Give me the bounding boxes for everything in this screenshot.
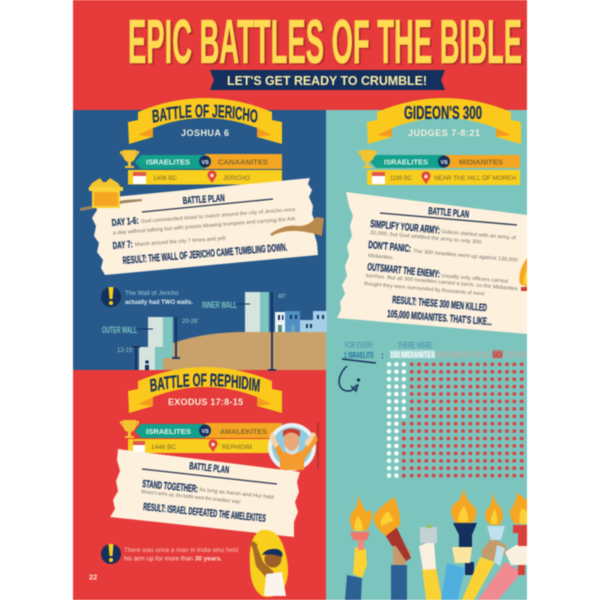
text: ratio heading: 1 ISRAELITE	[344, 350, 374, 360]
matchup bar: VS	[202, 429, 209, 435]
text: battle plan: Usually only officers carried	[441, 273, 508, 285]
page number: 22	[89, 572, 97, 582]
text: ratio heading: WHO WANTED TO KILL	[437, 350, 492, 360]
matchup bar: VS	[202, 160, 209, 166]
diagram: walls of jericho: 40'	[278, 294, 286, 300]
matchup bar: VS	[440, 160, 448, 166]
illustration: boy raising arm	[250, 530, 288, 597]
text: ratio heading: 150 MIDIANITES	[390, 350, 435, 360]
text: ratio heading: :	[381, 350, 384, 360]
icon: torch at paper edge	[519, 258, 527, 291]
battle plan paper	[110, 449, 300, 537]
lighter	[419, 523, 442, 600]
matchup bar: ISRAELITES	[146, 158, 190, 166]
text: battle plan: DAY 1-6:	[111, 216, 139, 229]
illustration: houses	[275, 311, 327, 332]
date and place bar: 1406 BC	[153, 175, 177, 182]
text: battle plan	[141, 461, 277, 525]
callout: two walls	[101, 287, 193, 307]
ribbon heading: battle of rephidim	[127, 366, 283, 414]
date and place bar: 1446 BC	[151, 444, 176, 451]
ribbon heading: battle of jericho: BATTLE OF JERICHO	[152, 104, 258, 124]
text: battle plan: SIMPLIFY YOUR ARMY:	[370, 218, 441, 237]
text: battle plan: Moses's arms up, the battle went the Israelites' way!	[141, 489, 241, 505]
date and place bar: JERICHO	[223, 175, 250, 182]
date and place bar: NEAR THE HILL OF MOREH	[434, 175, 516, 182]
text: battle plan: RESULT: THE WALL OF JERICHO CAME TUMBLING DOWN.	[122, 242, 288, 267]
matchup bar	[135, 154, 282, 169]
matchup bar	[135, 423, 282, 438]
text: battle plan: a day without talking but with priests blowing trumpets and carrying the Ark	[113, 216, 296, 236]
text: ratio heading: THERE WERE	[398, 340, 432, 350]
callout: man in india: There was once a man in India who held	[124, 547, 239, 554]
callout: two walls: actually had TWO walls.	[125, 299, 193, 306]
scripture reference: JUDGES 7-8:21	[408, 128, 480, 138]
text: battle plan: DAY 7:	[112, 239, 133, 252]
ribbon heading: battle of jericho	[127, 97, 283, 145]
diagram: walls of jericho: 20-26'	[182, 319, 198, 325]
torch 5	[462, 492, 507, 600]
text: ratio heading: & EVERY	[504, 350, 527, 360]
text: battle plan: DON'T PANIC:	[368, 239, 412, 255]
panel: battle of rephidim	[88, 366, 320, 598]
date and place bar	[367, 170, 520, 185]
text: battle plan: March around the city 7 times and yell.	[135, 236, 227, 248]
subtitle banner	[210, 70, 445, 90]
panel: battle of rephidim background	[73, 370, 326, 600]
matchup bar: AMALEKITES	[220, 427, 267, 436]
text: battle plan: BATTLE PLAN	[189, 461, 230, 476]
icon: trophy	[120, 150, 139, 168]
torch 6	[478, 493, 527, 600]
matchup bar	[370, 155, 520, 168]
text: battle plan: thought they were surrounded by thousands of men!	[364, 281, 485, 298]
scripture reference: EXODUS 17:8-15	[168, 397, 243, 407]
text: battle plan	[111, 193, 296, 267]
battle plan paper	[92, 178, 318, 275]
text: battle plan: 105,000 MIDIANITES. THAT'S LIKE...	[387, 308, 492, 328]
text: battle plan: STAND TOGETHER:	[142, 478, 199, 495]
icon: trophy	[358, 150, 377, 168]
matchup bar: CANAANITES	[218, 158, 268, 166]
ribbon heading: battle of rephidim: BATTLE OF REPHIDIM	[149, 372, 261, 393]
icon: ark of the covenant	[80, 178, 142, 211]
text: battle plan: BATTLE PLAN	[182, 193, 225, 207]
icon: trophy	[120, 420, 139, 438]
text: battle plan: Gideon started with an army of	[441, 229, 517, 242]
text: ratio heading: FOR EVERY	[345, 340, 373, 350]
panel: gideon's 300 background	[326, 110, 527, 600]
panel: gideon's 300	[337, 98, 527, 600]
title	[128, 18, 524, 66]
date and place bar	[128, 439, 282, 453]
matchup bar: ISRAELITES	[384, 158, 428, 166]
torch 4	[441, 488, 477, 600]
icon: curved arrow	[339, 366, 359, 391]
date and place bar	[128, 170, 282, 184]
panel: battle of jericho	[79, 97, 328, 372]
ribbon heading: gideon's 300	[367, 98, 521, 144]
text: battle plan: Midianites.	[368, 253, 394, 261]
ribbon heading: gideon's 300: GIDEON'S 300	[404, 103, 482, 123]
diagram: walls of jericho: OUTER WALL	[102, 325, 137, 336]
text: battle plan: torches. But all 300 Israelites carried a torch, so the Midianites	[366, 273, 518, 292]
panel: battle of jericho background	[73, 110, 326, 370]
diagram: walls of jericho	[102, 292, 326, 370]
icon: moses with staff	[268, 422, 318, 471]
diagram: walls of jericho: INNER WALL	[202, 300, 237, 311]
chart: dot grid of israelite and midianites	[385, 361, 527, 479]
date and place bar: REPHIDIM	[222, 444, 252, 451]
callout: two walls: The Wall of Jericho	[125, 290, 179, 297]
date and place bar: 1169 BC	[390, 175, 412, 182]
battle plan paper	[337, 192, 527, 334]
text: battle plan: OUTSMART THE ENEMY:	[367, 261, 441, 281]
diagram: walls of jericho: 12-15'	[117, 348, 134, 354]
subtitle banner: LET'S GET READY TO CRUMBLE!	[227, 73, 427, 88]
matchup bar: ISRAELITES	[146, 427, 191, 436]
text: battle plan	[364, 206, 518, 328]
text: battle plan: RESULT: THESE 300 MEN KILLED	[392, 294, 488, 314]
callout: man in india: his arm up for more than 30 years.	[124, 556, 222, 562]
text: battle plan: BATTLE PLAN	[428, 206, 470, 221]
icon: shofar horn	[270, 217, 324, 236]
text: battle plan: RESULT: ISRAEL DEFEATED THE AMELEKITES	[143, 501, 266, 525]
scripture reference: JOSHUA 6	[181, 128, 229, 138]
torch 1	[345, 495, 372, 600]
text: battle plan: 32,000, but God whittled the army to only 300.	[370, 230, 483, 246]
torch 2	[373, 497, 411, 600]
callout: man in india	[101, 544, 239, 564]
text: battle plan: God commanded Israel to march around the city of Jericho once	[141, 207, 296, 225]
panel: page header red	[73, 0, 527, 110]
text: ratio heading: EACH	[493, 350, 502, 360]
text: battle plan: The 300 Israelites went up against 135,000	[413, 249, 518, 264]
matchup bar: MIDIANITES	[459, 158, 503, 166]
text: ratio heading	[342, 340, 527, 363]
text: battle plan: As long as Aaron and Hur held	[199, 487, 274, 501]
illustration: raised hands with torches	[345, 488, 527, 600]
